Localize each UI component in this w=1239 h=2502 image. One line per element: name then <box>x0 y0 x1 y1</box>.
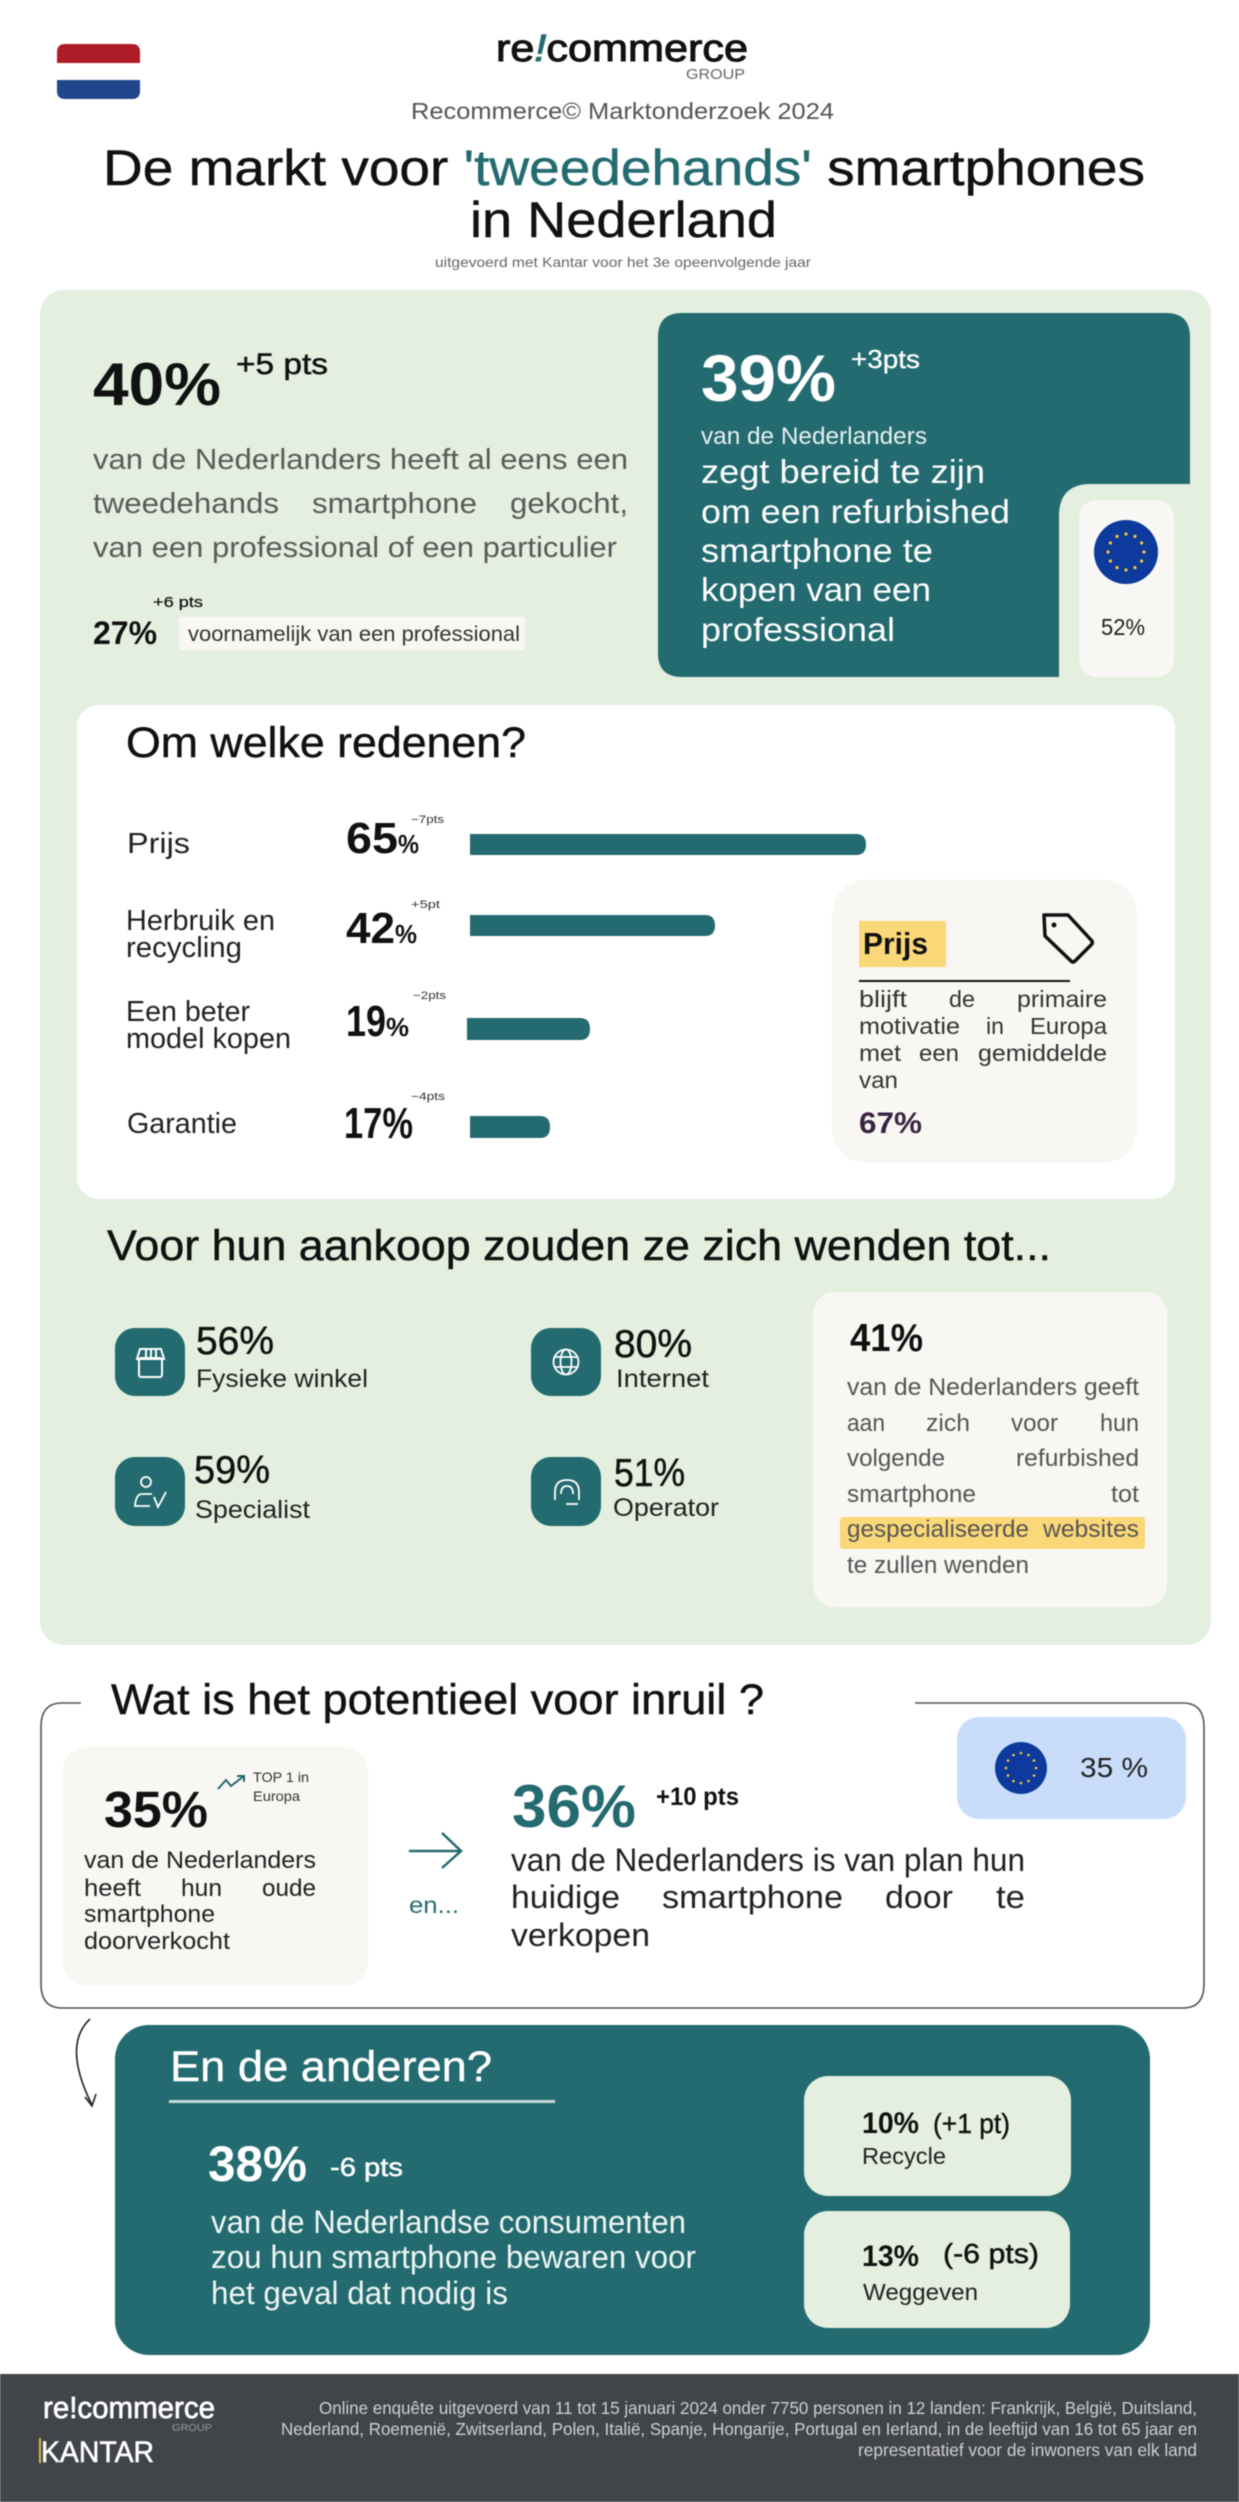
panel: teal 39 percent card: smartphone te <box>701 532 933 569</box>
stat: 40 percent bought second hand: +5 pts <box>236 348 328 381</box>
bar row: Herbruik en recycling <box>126 899 715 964</box>
stat: 27 percent from professional: 27% <box>93 615 157 651</box>
card: 35 percent resold: oude <box>262 1875 316 1902</box>
logo: recommerce group: re!commerce <box>496 28 748 70</box>
panel: teal 39 percent card: +3pts <box>851 344 920 374</box>
panel: teal 39 percent card: 39% <box>701 341 836 415</box>
callout: 41 percent specialised websites: aan <box>847 1410 885 1437</box>
card: EU comparison 35 percent <box>957 1717 1186 1819</box>
stat: 36 percent plan to sell: door <box>885 1879 953 1915</box>
icon: rising trend arrow <box>218 1776 244 1789</box>
card: 35 percent resold: doorverkocht <box>84 1928 230 1955</box>
logo: recommerce footer: re!commerce <box>43 2390 215 2425</box>
callout: 41 percent specialised websites: smartphone <box>847 1481 976 1508</box>
callout: 41 percent specialised websites: te zullen wenden <box>847 1552 1029 1579</box>
heading: and the others: En de anderen? <box>170 2043 492 2091</box>
channel: physical store: 56% <box>196 1320 274 1363</box>
panel: teal others panel <box>115 2025 1150 2355</box>
stat: 40 percent bought second hand: smartphone <box>312 488 477 520</box>
stat: 40 percent bought second hand: van een professional of een particulier <box>93 532 617 564</box>
bar row: Een beter model kopen: Een beter <box>126 996 250 1028</box>
stat: 40 percent bought second hand: tweedehands <box>93 488 279 520</box>
stat: 36 percent plan to sell: huidige <box>511 1879 620 1915</box>
card: 35 percent resold: 35% <box>104 1781 208 1838</box>
heading: reasons: Om welke redenen? <box>126 719 526 767</box>
callout: 41 percent specialised websites: refurbished <box>1016 1445 1139 1472</box>
panel: teal 39 percent card: van de Nederlanders <box>701 423 927 450</box>
callout: price motivation in Europe: van <box>859 1067 898 1093</box>
bar row: Garantie: −4pts <box>411 1091 446 1103</box>
card: EU comparison 35 percent: 35 % <box>1080 1752 1148 1783</box>
callout: price motivation in Europe: 67% <box>859 1107 922 1140</box>
footnote: methodology: Nederland, Roemenië, Zwitserland, Polen, Italië, Spanje, Hongarije, Portugal en Ierland, in de leeftijd van 16 tot 65 jaar en <box>281 2419 1197 2439</box>
stat: 38 percent keep phone <box>208 2136 696 2311</box>
stat: 36 percent plan to sell: verkopen <box>511 1917 650 1953</box>
stat: 38 percent keep phone: 38% <box>208 2136 307 2192</box>
callout: price motivation in Europe: in <box>986 1013 1004 1039</box>
callout: price motivation in Europe: Europa <box>1030 1013 1107 1039</box>
title: in Nederland <box>470 192 777 248</box>
panel: teal 39 percent card: professional <box>701 611 895 648</box>
heading: trade-in potential: Wat is het potentieel voor inruil ? <box>111 1676 764 1724</box>
subtitle: market research: Recommerce© Marktonderzoek 2024 <box>411 98 834 124</box>
card: recycle: (+1 pt) <box>933 2108 1010 2139</box>
channel: internet: 80% <box>614 1323 692 1366</box>
callout: 41 percent specialised websites: van de Nederlanders geeft <box>847 1374 1139 1401</box>
panel: teal 39 percent card: kopen van een <box>701 571 931 608</box>
bar row: Prijs: % <box>398 829 419 859</box>
icon: store <box>137 1349 164 1377</box>
bar row: Herbruik en recycling: Herbruik en <box>126 905 275 937</box>
bar row: Prijs <box>127 814 866 863</box>
channel: operator <box>531 1452 719 1526</box>
callout: price motivation in Europe <box>832 880 1137 1163</box>
stat: 36 percent plan to sell <box>511 1773 1025 1953</box>
icon: EU flag <box>1094 520 1158 584</box>
icon: headset <box>555 1480 579 1504</box>
panel: trade-in potential outline <box>41 1676 1204 2008</box>
bar row: Een beter model kopen: model kopen <box>126 1023 291 1055</box>
bar row: Garantie <box>127 1091 550 1148</box>
callout: price motivation in Europe: met <box>859 1040 902 1066</box>
channel: internet <box>531 1323 709 1396</box>
title: De markt voor 'tweedehands' smartphones <box>103 140 1145 196</box>
channel: operator: 51% <box>614 1452 685 1495</box>
bar row: Een beter model kopen: % <box>386 1012 409 1042</box>
bar row: Herbruik en recycling: +5pt <box>411 899 440 911</box>
logo: recommerce footer: GROUP <box>172 2423 212 2434</box>
panel: white reasons panel <box>77 705 1175 1199</box>
channel: specialist: 59% <box>194 1449 270 1492</box>
callout: 41 percent specialised websites: tot <box>1111 1481 1139 1508</box>
bar row: Een beter model kopen: −2pts <box>413 990 447 1002</box>
card: recycle <box>804 2076 1071 2196</box>
stat: 36 percent plan to sell: te <box>996 1879 1025 1915</box>
callout: 41 percent specialised websites: volgende <box>847 1445 945 1472</box>
stat: 38 percent keep phone: zou hun smartphone bewaren voor <box>211 2239 696 2275</box>
card: give away <box>804 2211 1070 2328</box>
callout: price motivation in Europe: motivatie <box>859 1013 960 1039</box>
card: 35 percent resold <box>63 1747 368 1986</box>
bar row: Een beter model kopen <box>126 990 590 1055</box>
card: 35 percent resold: TOP 1 in <box>253 1769 309 1785</box>
stat: 36 percent plan to sell: 36% <box>512 1773 636 1840</box>
footnote: methodology <box>281 2398 1197 2460</box>
callout: price motivation in Europe: Prijs <box>863 926 928 961</box>
stat: 38 percent keep phone: -6 pts <box>330 2152 403 2182</box>
card: give away: (-6 pts) <box>943 2238 1039 2269</box>
panel: green main panel <box>40 290 1211 1645</box>
arrow: from sold to plan: en... <box>409 1892 459 1918</box>
icon: EU flag <box>995 1742 1047 1794</box>
arrow: curved to others panel <box>76 2019 96 2106</box>
bar row: Herbruik en recycling: % <box>395 919 417 949</box>
footer <box>0 2374 1239 2502</box>
channel: physical store <box>115 1320 368 1396</box>
card: EU comparison 52 percent: 52% <box>1101 614 1145 640</box>
stat: 38 percent keep phone: van de Nederlandse consumenten <box>211 2204 686 2240</box>
card: 35 percent resold: smartphone <box>84 1901 215 1928</box>
icon: globe <box>554 1350 578 1374</box>
stat: 36 percent plan to sell: smartphone <box>662 1879 843 1915</box>
logo: recommerce group: GROUP <box>686 66 745 83</box>
card: recycle: Recycle <box>862 2143 946 2169</box>
card: give away: 13% <box>862 2240 919 2273</box>
callout: 41 percent specialised websites: hun <box>1100 1410 1139 1437</box>
callout: price motivation in Europe: primaire <box>1017 986 1107 1012</box>
logo: recommerce group <box>496 28 748 83</box>
stat: 27 percent from professional <box>93 594 525 651</box>
bar row: Herbruik en recycling: 42 <box>346 904 395 953</box>
panel: teal 39 percent card: om een refurbished <box>701 493 1010 530</box>
title <box>103 140 1145 248</box>
callout: price motivation in Europe: een <box>919 1040 959 1066</box>
callout: 41 percent specialised websites: 41% <box>850 1317 923 1360</box>
callout: 41 percent specialised websites: gespecialiseerde <box>847 1516 1029 1543</box>
stat: 40 percent bought second hand: gekocht, <box>510 488 628 520</box>
bar row: Een beter model kopen: 19 <box>346 997 386 1046</box>
arrow: from sold to plan <box>409 1833 461 1918</box>
stat: 40 percent bought second hand: van de Nederlanders heeft al eens een <box>93 444 628 476</box>
channel: internet: Internet <box>616 1365 709 1393</box>
channel: physical store: Fysieke winkel <box>196 1365 368 1393</box>
bar row: Prijs: Prijs <box>127 828 190 860</box>
card: 35 percent resold: van de Nederlanders <box>84 1847 316 1874</box>
card: recycle: 10% <box>862 2107 919 2140</box>
logo: Kantar: KANTAR <box>41 2436 154 2469</box>
stat: 36 percent plan to sell: van de Nederlanders is van plan hun <box>511 1842 1025 1878</box>
callout: 41 percent specialised websites <box>813 1292 1167 1607</box>
stat: 38 percent keep phone: het geval dat nodig is <box>211 2275 508 2311</box>
callout: 41 percent specialised websites: websites <box>1042 1516 1139 1543</box>
stat: 27 percent from professional: voornamelijk van een professional <box>188 623 520 646</box>
icon: person with check <box>135 1477 166 1507</box>
card: 35 percent resold: hun <box>181 1875 222 1902</box>
card: 35 percent resold: Europa <box>253 1788 300 1804</box>
heading: where they would buy: Voor hun aankoop zouden ze zich wenden tot... <box>107 1222 1051 1270</box>
stat: 40 percent bought second hand <box>93 348 628 564</box>
bar row: Garantie: 17% <box>344 1099 413 1148</box>
caption: conducted with Kantar: uitgevoerd met Kantar voor het 3e opeenvolgende jaar <box>435 254 811 270</box>
footnote: methodology: representatief voor de inwoners van elk land <box>858 2440 1197 2460</box>
callout: price motivation in Europe: gemiddelde <box>978 1040 1107 1066</box>
channel: specialist <box>115 1449 310 1526</box>
bar row: Prijs: −7pts <box>411 814 445 826</box>
bar row: Herbruik en recycling: recycling <box>126 932 242 964</box>
flag: Netherlands <box>57 44 140 99</box>
stat: 40 percent bought second hand: 40% <box>93 351 221 418</box>
callout: 41 percent specialised websites: zich <box>926 1410 970 1437</box>
callout: price motivation in Europe: de <box>949 986 975 1012</box>
callout: 41 percent specialised websites: voor <box>1011 1410 1058 1437</box>
panel: teal 39 percent card: zegt bereid te zijn <box>701 453 985 490</box>
stat: 36 percent plan to sell: +10 pts <box>656 1783 739 1811</box>
channel: specialist: Specialist <box>195 1496 310 1524</box>
footnote: methodology: Online enquête uitgevoerd van 11 tot 15 januari 2024 onder 7750 personen in 12 landen: Frankrijk, België, Duitsland, <box>319 2398 1197 2418</box>
bar row: Garantie: Garantie <box>127 1108 237 1140</box>
panel: teal 39 percent card <box>658 313 1190 677</box>
channel: operator: Operator <box>613 1494 719 1522</box>
card: 35 percent resold: heeft <box>84 1875 141 1902</box>
bar row: Prijs: 65 <box>346 814 398 863</box>
stat: 27 percent from professional: +6 pts <box>153 594 203 611</box>
icon: price tag <box>1044 915 1092 962</box>
card: EU comparison 52 percent <box>1079 500 1174 677</box>
callout: price motivation in Europe: blijft <box>859 986 908 1012</box>
card: give away: Weggeven <box>863 2279 978 2305</box>
